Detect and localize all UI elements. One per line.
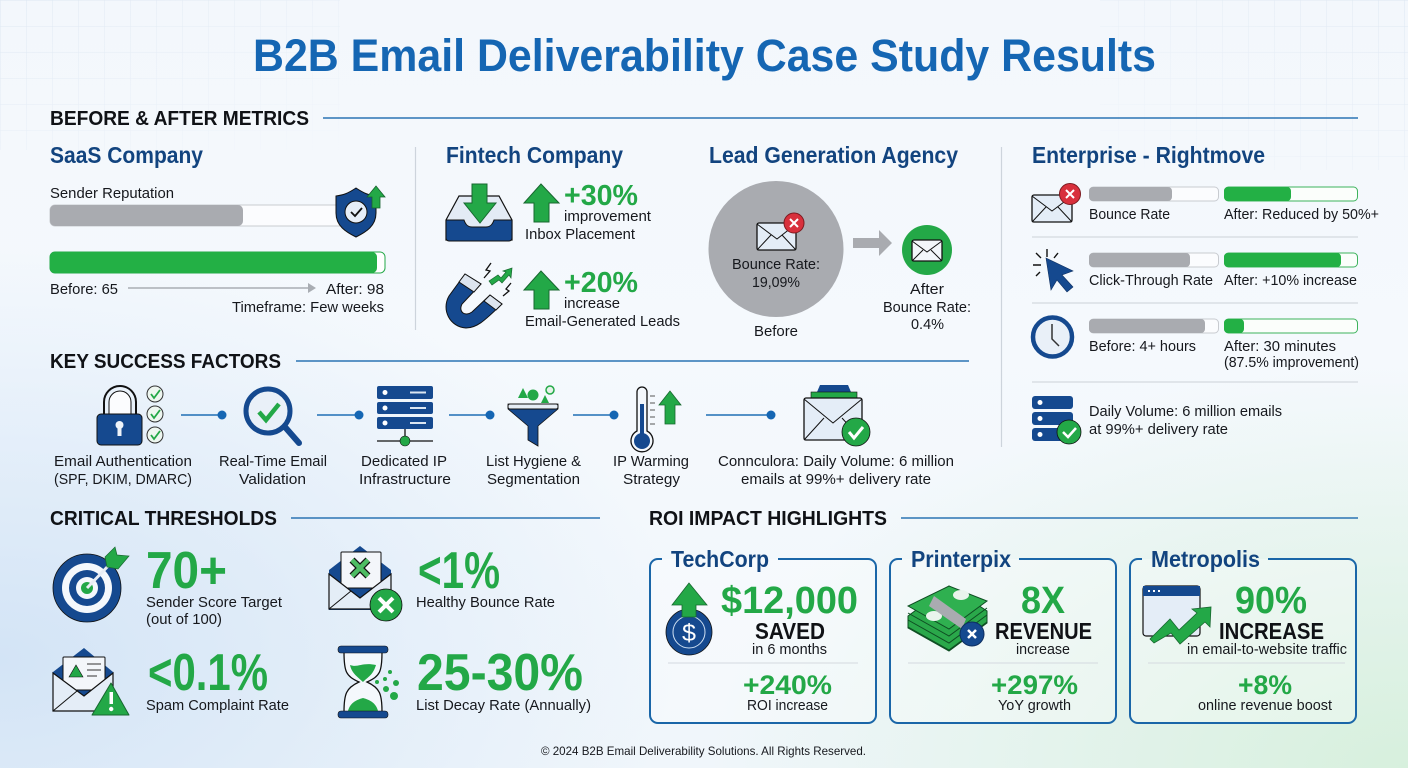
icon: inbox: [446, 184, 512, 241]
factor: IP warming: [613, 387, 689, 488]
factor: conclusion: [718, 385, 954, 488]
factor: dedicated IP: Dedicated IP: [361, 453, 447, 470]
before circle: [708, 181, 844, 317]
arrow: before to after: [853, 230, 892, 256]
threshold: bounce rate: Healthy Bounce Rate: [416, 594, 555, 611]
section heading: before and after metrics: BEFORE & AFTER METRICS: [50, 107, 309, 130]
panel: TechCorp: TechCorp: [671, 546, 769, 572]
panel: TechCorp: [650, 546, 876, 723]
icon: hourglass: [338, 646, 399, 718]
icon: envelope stack with check: [804, 385, 870, 446]
panel: lead generation agency: Before: [754, 323, 798, 340]
icon: clock: [1033, 318, 1072, 356]
factor: list hygiene: Segmentation: [487, 471, 580, 488]
panel: TechCorp: +240%: [743, 670, 832, 700]
arrow: connector: [181, 410, 226, 420]
threshold: list decay: List Decay Rate (Annually): [416, 697, 591, 714]
threshold: spam complaints: <0.1%: [148, 644, 268, 702]
icon: magnifier with check: [246, 389, 299, 443]
icon: envelope with red x: [1032, 184, 1080, 222]
threshold: sender score: [53, 542, 283, 628]
panel: Metropolis: 90%: [1235, 580, 1307, 622]
panel: TechCorp: $12,000: [721, 580, 858, 622]
icon: server with check: [1032, 396, 1081, 444]
row: bounce rate: After: Reduced by 50%+: [1224, 206, 1379, 223]
footer: © 2024 B2B Email Deliverability Solutions. All Rights Reserved.: [541, 744, 866, 758]
row: time: Before: 4+ hours: [1089, 338, 1196, 355]
icon: browser with growth arrow: [1143, 586, 1211, 644]
icon: envelope with x marks: [329, 546, 402, 621]
panel: Fintech company: Fintech Company: [446, 142, 623, 168]
row: time: (87.5% improvement): [1224, 354, 1359, 371]
threshold: spam complaints: Spam Complaint Rate: [146, 697, 289, 714]
panel: TechCorp: in 6 months: [752, 641, 827, 658]
arrow: connector: [573, 410, 618, 420]
section heading: key success factors: KEY SUCCESS FACTORS: [50, 350, 281, 373]
panel: lead generation agency: Bounce Rate:: [732, 256, 820, 273]
panel: lead generation agency: 19,09%: [752, 274, 800, 291]
panel: Fintech company: +20%: [564, 267, 638, 299]
panel: Printerpix: Printerpix: [911, 546, 1011, 572]
factor: list hygiene: List Hygiene &: [486, 453, 581, 470]
section heading: critical thresholds: CRITICAL THRESHOLDS: [50, 507, 277, 530]
panel: Metropolis: Metropolis: [1151, 546, 1260, 572]
row: click-through rate: After: +10% increase: [1224, 272, 1357, 289]
panel: lead generation agency: After: [910, 281, 944, 298]
threshold: sender score: (out of 100): [146, 611, 222, 628]
row: click-through rate: Click-Through Rate: [1089, 272, 1213, 289]
panel: Metropolis: INCREASE: [1219, 618, 1324, 644]
panel: Fintech company: +30%: [564, 180, 638, 212]
panel: SaaS company: [50, 142, 385, 316]
factor: IP warming: IP Warming: [613, 453, 689, 470]
icon: dollar coin with arrow: $: [682, 620, 696, 647]
factor: real-time validation: Real-Time Email: [219, 453, 327, 470]
icon: envelope with warning: [53, 648, 129, 715]
icon: target with arrow: [53, 547, 129, 622]
panel: enterprise Rightmove: [1032, 142, 1379, 444]
row: time: [1033, 318, 1359, 371]
threshold: list decay: 25-30%: [417, 644, 583, 702]
panel: Metropolis: [1130, 546, 1356, 723]
panel: thresholds: [53, 542, 591, 718]
arrow: before to after: [128, 283, 316, 293]
icon: server rack: [377, 386, 433, 446]
arrow: connector: [449, 410, 494, 420]
row: daily volume: Daily Volume: 6 million emails: [1089, 403, 1282, 420]
factor: conclusion: emails at 99%+ delivery rate: [741, 471, 931, 488]
panel: Printerpix: [890, 546, 1116, 723]
row: daily volume: at 99%+ delivery rate: [1089, 421, 1228, 438]
factor: email authentication: (SPF, DKIM, DMARC): [54, 471, 192, 488]
panel: lead generation agency: Lead Generation Agency: [709, 142, 958, 168]
factor: dedicated IP: Infrastructure: [359, 471, 451, 488]
threshold: spam complaints: [53, 644, 289, 715]
panel: success factors flow: [54, 385, 954, 488]
panel: Fintech company: Inbox Placement: [525, 226, 636, 243]
panel: Fintech company: increase: [564, 295, 620, 312]
arrow: connector: [317, 410, 364, 420]
icon: up arrow: [524, 271, 559, 309]
panel: SaaS company: Sender Reputation: [50, 185, 174, 202]
icon: envelope with red x: [757, 213, 804, 250]
panel: Printerpix: +297%: [991, 670, 1078, 700]
panel: Metropolis: online revenue boost: [1198, 697, 1333, 714]
panel: Printerpix: REVENUE: [995, 618, 1092, 644]
factor: list hygiene: [486, 386, 581, 488]
panel: TechCorp: SAVED: [755, 618, 825, 644]
factor: conclusion: Connculora: Daily Volume: 6 million: [718, 453, 954, 470]
section heading: ROI impact highlights: ROI IMPACT HIGHLIGHTS: [649, 507, 887, 530]
panel: lead generation agency: 0.4%: [911, 316, 944, 333]
panel: Fintech company: improvement: [564, 208, 652, 225]
factor: email authentication: Email Authentication: [54, 453, 192, 470]
icon: stack of cash: [908, 586, 987, 651]
row: bounce rate: [1032, 184, 1379, 223]
panel: Fintech company: [446, 142, 680, 330]
title: B2B Email Deliverability Case Study Results: [253, 30, 1156, 81]
panel: enterprise Rightmove: Enterprise - Rightmove: [1032, 142, 1265, 168]
threshold: sender score: 70+: [146, 542, 227, 600]
row: time: After: 30 minutes: [1224, 338, 1336, 355]
after circle with envelope: [902, 225, 952, 275]
icon: funnel: [508, 386, 558, 446]
icon: shield with up arrow: [336, 186, 385, 237]
panel: SaaS company: Timeframe: Few weeks: [232, 299, 384, 316]
factor: dedicated IP: [359, 386, 451, 488]
row: bounce rate: Bounce Rate: [1089, 206, 1170, 223]
factor: IP warming: Strategy: [623, 471, 680, 488]
panel: SaaS company: Before: 65: [50, 281, 118, 298]
icon: padlock and checks: [97, 386, 163, 445]
icon: thermometer with arrow: [631, 387, 681, 452]
panel: Fintech company: Email-Generated Leads: [525, 313, 680, 330]
threshold: list decay: [338, 644, 591, 718]
row: click-through rate: [1033, 249, 1358, 292]
icon: cursor: [1033, 249, 1073, 292]
factor: email authentication: [54, 386, 192, 488]
threshold: bounce rate: <1%: [418, 542, 500, 600]
panel: lead generation agency: [708, 142, 971, 340]
threshold: sender score: Sender Score Target: [146, 594, 283, 611]
panel: SaaS company: After: 98: [326, 281, 384, 298]
panel: Printerpix: increase: [1016, 641, 1070, 658]
threshold: bounce rate: [329, 542, 555, 621]
arrow: connector: [706, 410, 776, 420]
panel: Printerpix: 8X: [1021, 580, 1066, 622]
panel: Metropolis: +8%: [1238, 670, 1292, 700]
factor: real-time validation: [219, 389, 327, 488]
panel: Printerpix: YoY growth: [998, 697, 1071, 714]
icon: up arrow: [524, 184, 559, 222]
icon: dollar coin with arrow: [666, 583, 712, 655]
panel: Metropolis: in email-to-website traffic: [1187, 641, 1347, 658]
factor: real-time validation: Validation: [239, 471, 306, 488]
panel: SaaS company: SaaS Company: [50, 142, 203, 168]
panel: TechCorp: ROI increase: [747, 697, 828, 714]
before bar: [50, 205, 346, 226]
row: daily volume: [1032, 396, 1282, 444]
icon: magnet: [446, 263, 512, 328]
after bar: [50, 252, 385, 273]
panel: lead generation agency: Bounce Rate:: [883, 299, 971, 316]
